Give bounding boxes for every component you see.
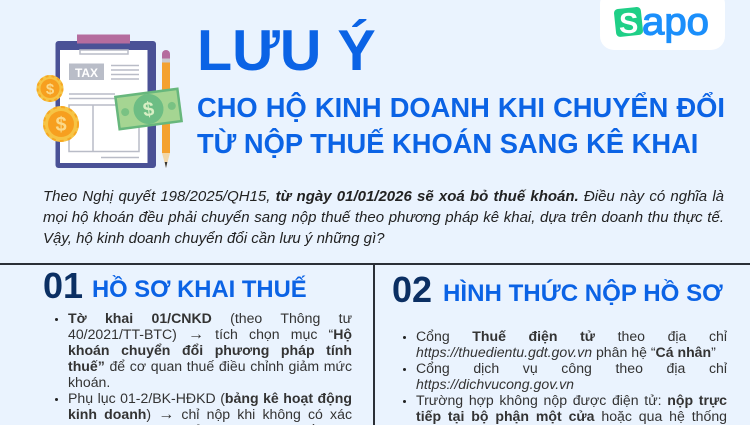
panel 02 heading: HÌNH THỨC NỘP HỒ SƠ	[443, 280, 723, 307]
panel 02 bullets: Trường hợp không nộp được điện tử: nộp trực	[416, 392, 727, 408]
coin large	[43, 106, 79, 142]
subtitle	[197, 92, 725, 159]
coin large: $	[55, 114, 67, 136]
logo: Sapo: S	[619, 8, 638, 40]
banknote	[114, 87, 183, 131]
subtitle: TỪ NỘP THUẾ KHOÁN SANG KÊ KHAI	[197, 128, 698, 159]
coin small: $	[46, 81, 55, 98]
panel 02 bullets	[403, 328, 727, 424]
panel 01 bullets: kinh doanh) → chỉ nộp khi không có xác	[68, 406, 352, 423]
tax label	[69, 64, 139, 80]
clipboard board	[56, 34, 156, 168]
tax label: TAX	[75, 66, 98, 80]
logo: Sapo: apo	[642, 2, 709, 44]
panel 01 bullets: Phụ lục 01-2/BK-HĐKD (bảng kê hoạt động	[68, 390, 352, 406]
panel 02 bullets: Cổng dịch vụ công theo địa chỉ	[416, 360, 727, 376]
form lines	[69, 94, 139, 158]
panel 02 bullets: tiếp tại bộ phận một cửa hoặc qua hệ thống	[416, 408, 727, 424]
panel 01 bullets: khoán chuyển đổi phương pháp tính	[68, 342, 352, 358]
panel 02 bullets: https://thuedientu.gdt.gov.vn phân hệ “Cá nhân”	[416, 344, 716, 360]
coin small	[36, 75, 64, 102]
panel: 02 submission methods	[375, 263, 750, 425]
panel 02 bullets: Cổng Thuế điện tử theo địa chỉ	[416, 328, 727, 344]
intro paragraph: mọi hộ khoán đều phải chuyển sang nộp thuế theo phương pháp kê khai, dựa trên doanh thu thực tế.	[43, 209, 724, 226]
logo: Sapo	[600, 0, 725, 50]
intro paragraph	[43, 188, 724, 247]
panel 01 bullets: Tờ khai 01/CNKD (theo Thông tư	[68, 310, 352, 326]
panel 01 heading: HỒ SƠ KHAI THUẾ	[92, 276, 307, 303]
panel 02 number: 02	[392, 269, 432, 310]
title: LƯU Ý	[197, 19, 376, 83]
intro paragraph: Vậy, hộ kinh doanh chuyển đổi cần lưu ý những gì?	[43, 230, 384, 247]
banknote: $	[142, 98, 156, 122]
panel 01 bullets: thuế” để cơ quan thuế điều chỉnh giảm mức	[68, 358, 352, 374]
panel 01 bullets	[55, 310, 352, 425]
panel: 01 tax dossier	[0, 263, 375, 425]
panel 01 bullets: 40/2021/TT-BTC) → tích chọn mục “Hộ	[68, 326, 352, 343]
panel 01 bullets: khoán.	[68, 374, 110, 390]
panel 01 number: 01	[43, 265, 83, 306]
pencil	[162, 50, 170, 168]
illustration: tax clipboard	[36, 34, 183, 168]
intro paragraph: Theo Nghị quyết 198/2025/QH15, từ ngày 01/01/2026 sẽ xoá bỏ thuế khoán. Điều này có nghĩa là	[43, 188, 724, 205]
subtitle: CHO HỘ KINH DOANH KHI CHUYỂN ĐỔI	[197, 92, 725, 123]
panel 02 bullets: https://dichvucong.gov.vn	[416, 376, 574, 392]
